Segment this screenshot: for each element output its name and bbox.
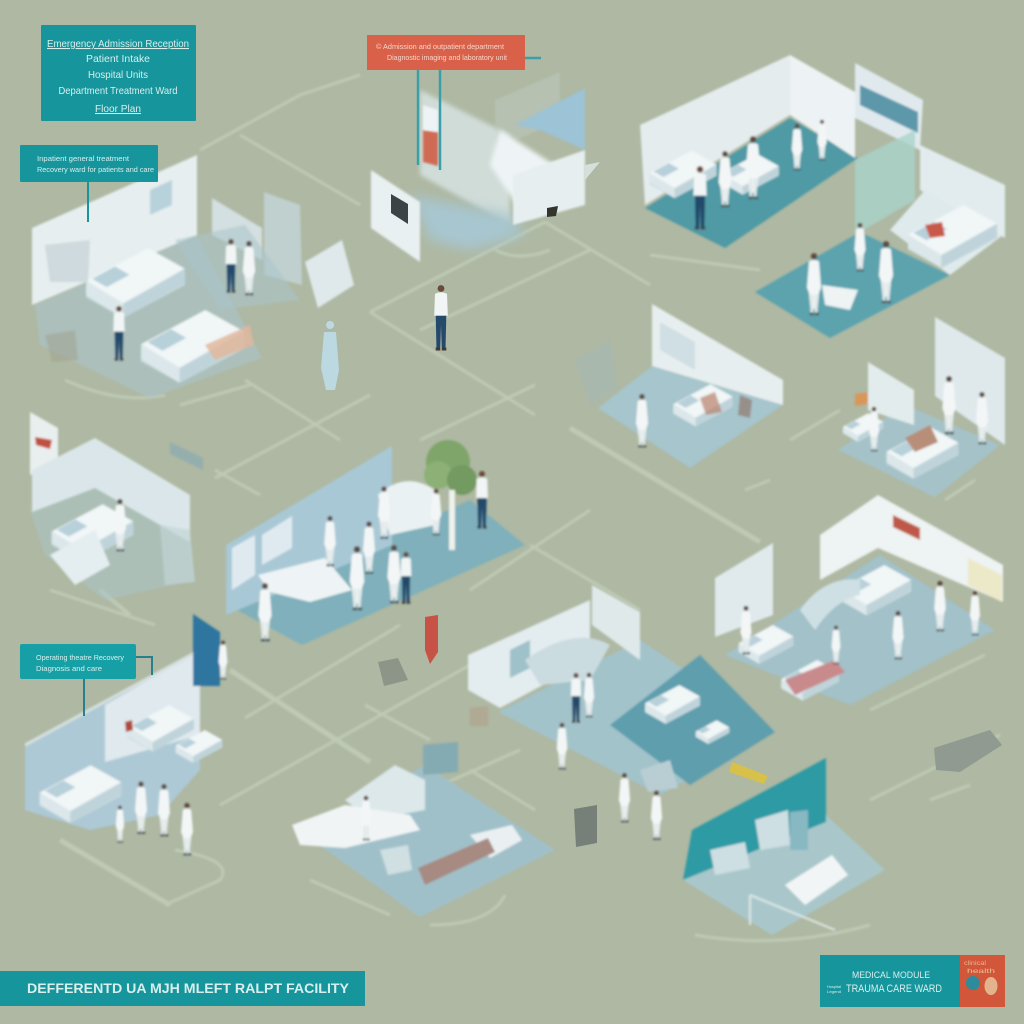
side panel [170,442,203,470]
sign [30,412,58,490]
staff group [693,166,707,230]
floor [228,500,525,645]
callout: red: © Admission and outpatient department [376,42,505,51]
callout: lower left: Diagnosis and care [36,664,102,673]
callout stem [87,182,89,222]
heading panel: top left: Patient Intake [86,53,150,65]
red sign [893,515,920,540]
equipment [710,810,790,875]
callout: left ward [20,145,158,182]
legend box: Hospital [827,984,841,989]
back wall [468,600,590,708]
back wall [640,55,790,205]
legend box: TRAUMA CARE WARD [846,983,942,995]
wall [652,304,783,405]
left wall [868,362,914,425]
callout stems lower left [84,657,152,716]
orange item [855,392,868,406]
red badge [960,955,1005,1007]
fog floor [410,195,525,250]
room: middle right [575,304,783,468]
staff [869,407,879,451]
patient table [418,838,495,885]
back wall [32,155,197,305]
cabinet unit [371,170,420,262]
blue wall [226,446,392,615]
patient beds [908,205,997,268]
room: bottom center [292,742,555,917]
staff [571,673,581,723]
scanner [378,481,435,535]
legend box: Legend [827,989,841,994]
door doctor [219,641,227,680]
yellow sign [729,762,768,784]
white bed [785,855,848,905]
floor [725,555,995,705]
bed [52,504,133,562]
floor [683,815,885,935]
back wall [32,438,190,542]
teal floor [645,118,858,248]
doctors pair [225,239,237,293]
side partition [212,198,262,260]
standing doctor center [434,285,448,350]
curved machine [800,579,860,630]
side wall [790,55,855,158]
room: top center [371,58,600,262]
room: lower left [25,614,227,855]
machines [525,638,610,685]
patient beds [886,428,958,479]
grey equipment box [378,658,408,686]
heading panel: top left: Department Treatment Ward [58,85,178,97]
red callout stems [418,58,541,170]
right bed floor [890,190,1003,275]
callout: red: Diagnostic imaging and laboratory unit [387,53,508,62]
monitor details [150,180,172,215]
foggy glass volume [420,90,510,225]
raised block [423,742,458,775]
red badge: health [967,969,995,975]
doctor [113,306,125,361]
white curved equipment [258,558,352,602]
floor [305,765,555,917]
wall [345,765,425,820]
bed [86,248,185,318]
glass room [855,130,915,235]
beds [649,150,717,198]
grey exam bench [934,730,1002,772]
room: lower right [715,495,1003,705]
edge [25,650,200,745]
back wall [935,317,1005,445]
corridor lines [50,75,1000,941]
sign board [855,63,923,150]
patient bed [141,310,244,383]
heading panel: top left: Floor Plan [95,103,141,115]
room: bottom right [683,758,885,935]
legend text: MEDICAL MODULE [852,970,930,981]
room: left middle [30,412,203,600]
callout: lower left: Operating theatre Recovery [36,653,124,662]
heading panel: top left [41,25,196,121]
deep teal mat [610,655,775,785]
callout: left ward: Recovery ward for patients and care [37,165,154,174]
teal floor right [755,232,950,338]
staff group [476,471,488,529]
callout: lower left [20,644,136,679]
teal wall [683,758,826,880]
small chair [470,706,488,726]
room: lower center [468,585,775,840]
room: right [838,317,1005,497]
callout: red [367,35,525,70]
room: top right [640,55,1005,338]
small figures [361,796,371,840]
wall bed [128,705,194,752]
patient beds [739,625,793,664]
staff [740,606,752,654]
back wall [105,650,200,762]
room: top left ward [32,155,354,398]
staff right [854,223,866,271]
standing doctor in gown [321,321,339,390]
heading panel: top left: Hospital Units [88,69,148,81]
floor [30,480,195,600]
tree [424,440,477,550]
door [193,614,220,686]
title banner: DEFFERENTD UA MJH MLEFT RALPT FACILITY [27,981,349,996]
grey cabinet [574,805,597,847]
main bed [40,765,121,823]
red banner [425,615,438,664]
small cart [547,206,558,217]
bed and linen [490,130,570,210]
blue floor wall [25,650,200,830]
white machines [292,805,420,848]
staff [135,781,147,834]
rail [750,895,835,930]
floor [838,405,1000,497]
right wing wall [920,145,1005,238]
title banner [0,971,365,1006]
front wall [513,150,585,225]
dark screen [391,194,408,224]
blue window [515,88,585,150]
center bed [840,565,911,616]
doctor [114,499,126,551]
callout: left ward: Inpatient general treatment [37,154,130,163]
floor [35,235,262,398]
wall boards [232,516,292,590]
legend box [820,955,1005,1007]
equipment [160,525,195,585]
desk [45,330,78,362]
heading text: Emergency Admission Reception [47,38,189,50]
doctor [636,394,648,447]
floor [598,366,783,468]
red badge: clinical [964,961,986,967]
red cabinet [423,130,438,166]
glass wall [495,72,560,150]
back wall [820,495,1003,602]
equipment [575,340,618,405]
left wall [715,543,773,637]
beds [645,685,700,724]
beds [673,384,733,426]
room: center [226,440,525,645]
floor [498,640,775,795]
